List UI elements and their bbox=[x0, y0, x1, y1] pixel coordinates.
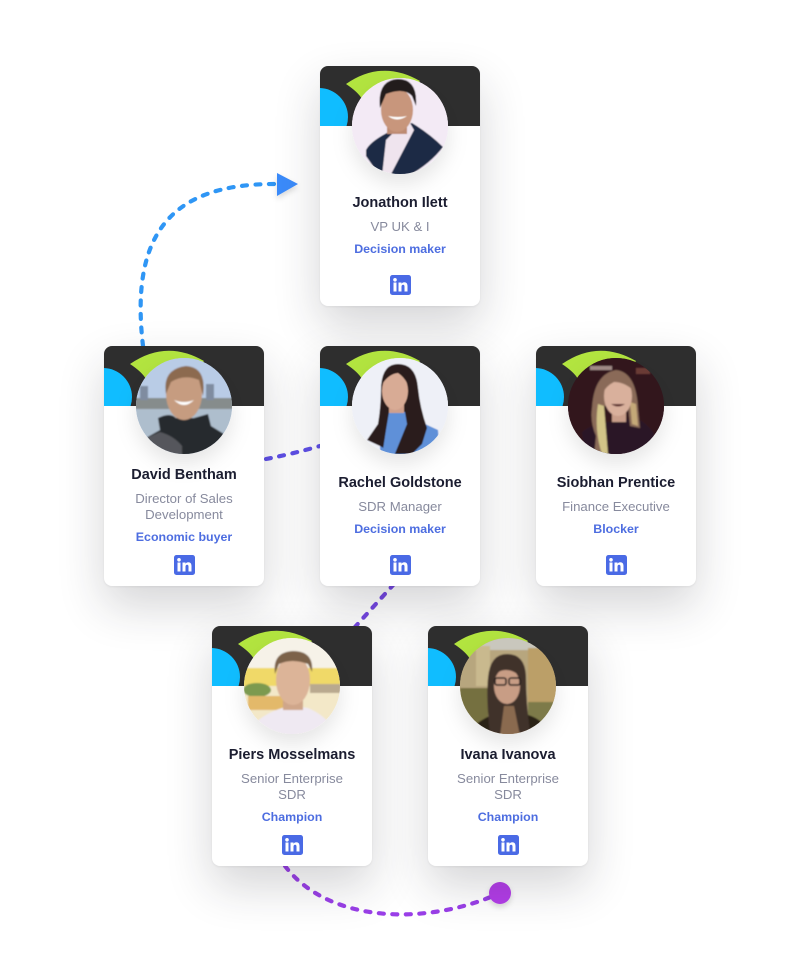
icon: linkedin bbox=[282, 835, 303, 855]
name: Piers Mosselmans bbox=[229, 747, 355, 763]
tag: Decision maker bbox=[354, 522, 446, 536]
role: VP UK & I bbox=[370, 219, 430, 234]
icon: linkedin bbox=[498, 835, 519, 855]
role: Senior Enterprise bbox=[457, 771, 559, 786]
role: SDR Manager bbox=[358, 499, 442, 514]
tag: Blocker bbox=[593, 522, 639, 536]
card: Ivana Ivanova bbox=[428, 626, 588, 866]
name: Rachel Goldstone bbox=[338, 475, 462, 491]
role: Development bbox=[145, 506, 223, 522]
card header with portrait bbox=[104, 346, 264, 468]
tag: Champion bbox=[478, 810, 538, 824]
icon: linkedin bbox=[174, 555, 195, 575]
card: Siobhan Prentice bbox=[536, 346, 696, 586]
role bbox=[241, 771, 343, 802]
card header with portrait bbox=[320, 66, 480, 188]
tag: Economic buyer bbox=[136, 530, 232, 544]
icon: linkedin bbox=[390, 555, 411, 575]
card: Piers Mosselmans bbox=[212, 626, 372, 866]
card: Rachel Goldstone bbox=[320, 346, 480, 586]
card header with portrait bbox=[536, 346, 696, 468]
name: Jonathon Ilett bbox=[352, 195, 448, 211]
role: SDR bbox=[494, 786, 522, 802]
card: Jonathon Ilett bbox=[320, 66, 480, 306]
name: David Bentham bbox=[131, 467, 237, 483]
card header with portrait bbox=[320, 346, 480, 468]
role bbox=[135, 491, 233, 522]
card header with portrait bbox=[428, 626, 588, 748]
icon: linkedin bbox=[390, 275, 411, 295]
tag: Champion bbox=[262, 810, 322, 824]
name: Siobhan Prentice bbox=[557, 475, 675, 491]
role: Director of Sales bbox=[135, 491, 233, 506]
card: David Bentham bbox=[104, 346, 264, 586]
icon: linkedin bbox=[606, 555, 627, 575]
name: Ivana Ivanova bbox=[460, 747, 556, 763]
role: Senior Enterprise bbox=[241, 771, 343, 786]
tag: Decision maker bbox=[354, 242, 446, 256]
card header with portrait bbox=[212, 626, 372, 748]
role bbox=[457, 771, 559, 802]
role: Finance Executive bbox=[562, 499, 670, 514]
role: SDR bbox=[278, 786, 306, 802]
